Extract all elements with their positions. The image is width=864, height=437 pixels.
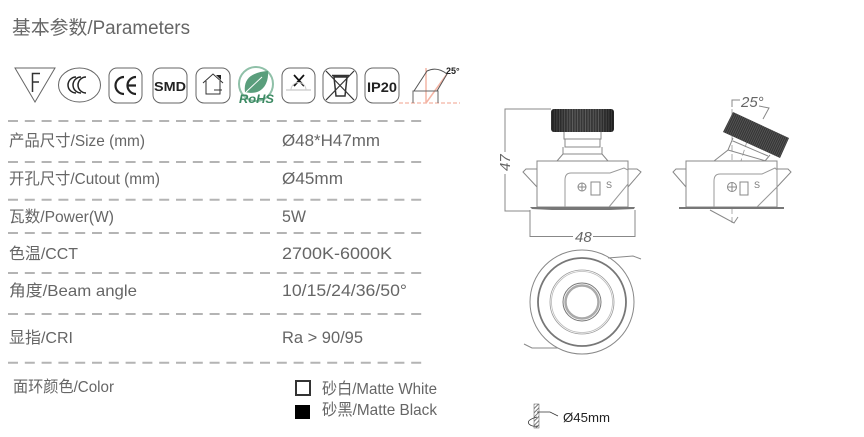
dimension: width 48 (530, 210, 635, 246)
icon: CCC mark (58, 68, 100, 102)
lens rings (563, 283, 601, 321)
certification icon row (15, 66, 460, 106)
icon: IP20 (365, 68, 399, 103)
slot (591, 182, 600, 195)
row: CCT (9, 244, 393, 263)
middle rings (550, 270, 614, 334)
icon: crossed-out bin (323, 68, 357, 103)
color option: matte black: 砂黑/Matte Black (322, 401, 438, 419)
row: size: 产品尺寸/Size (mm) (9, 132, 145, 150)
row: cutout (9, 169, 343, 188)
dimension: height 47: 47 (497, 154, 514, 171)
bracket (565, 168, 628, 207)
ceiling section (534, 404, 539, 428)
outer ring (530, 250, 634, 354)
icon: RoHS leaf (239, 67, 274, 106)
row: CCT: 2700K-6000K (282, 244, 393, 263)
row: power: 5W (282, 207, 306, 226)
icon: F mark (15, 68, 55, 102)
mounting tabs (524, 256, 641, 348)
neck (557, 132, 608, 161)
row: CRI (9, 328, 363, 347)
title: 基本参数/Parameters (12, 17, 190, 39)
body with clips (673, 161, 791, 207)
body with clips (523, 161, 641, 207)
icon: SMD mark: SMD (154, 79, 186, 94)
row: power: 瓦数/Power(W) (9, 208, 114, 226)
row: beam angle: 角度/Beam angle (9, 282, 137, 300)
center and angle lines (732, 100, 752, 223)
row: CRI: Ra > 90/95 (282, 328, 363, 347)
row: beam angle: 10/15/24/36/50° (282, 281, 407, 300)
row: size (9, 131, 380, 150)
row: CCT: 色温/CCT (9, 245, 78, 263)
dimension: width 48: 48 (575, 229, 592, 246)
row: cutout: Ø45mm (282, 169, 343, 188)
icon: CE mark (109, 68, 142, 103)
drawing: front view (497, 109, 641, 246)
knurled cap (551, 109, 614, 132)
tilted neck (714, 138, 770, 161)
dimension: height 47 (497, 109, 551, 211)
parameter table (8, 121, 438, 419)
color option: matte white: 砂白/Matte White (322, 380, 437, 398)
leader curve (528, 412, 558, 426)
bracket (714, 168, 777, 207)
icon: RoHS leaf: RoHS (239, 92, 274, 106)
screw (728, 182, 736, 192)
icon: 25 degree tilt (399, 66, 460, 103)
cutout label: Ø45mm (563, 410, 610, 425)
lower lens barrel (710, 210, 738, 223)
flange (530, 207, 635, 210)
row: color label: 面环颜色/Color (13, 378, 115, 396)
row: power (9, 207, 306, 226)
S mark: S (754, 180, 760, 190)
drawing: bottom view (524, 250, 641, 354)
cutout callout (528, 404, 610, 428)
icon: not dimmable cross (282, 68, 315, 103)
screw (578, 183, 586, 191)
tilted knurled cap (723, 112, 789, 158)
icon: indoor house (196, 68, 230, 103)
icon: SMD mark (153, 68, 187, 103)
flange ring (538, 258, 626, 346)
row: beam angle (9, 281, 407, 300)
icon: IP20: IP20 (367, 79, 397, 95)
row: CRI: 显指/CRI (9, 329, 73, 347)
row: cutout: 开孔尺寸/Cutout (mm) (9, 170, 160, 188)
drawing: tilted view (673, 94, 791, 223)
S mark: S (606, 180, 612, 190)
dimension: 25 degrees: 25° (740, 94, 764, 111)
slot (740, 182, 748, 195)
icon: 25 degree tilt: 25° (446, 66, 460, 76)
flange (679, 207, 784, 209)
row: size: Ø48*H47mm (282, 131, 380, 150)
